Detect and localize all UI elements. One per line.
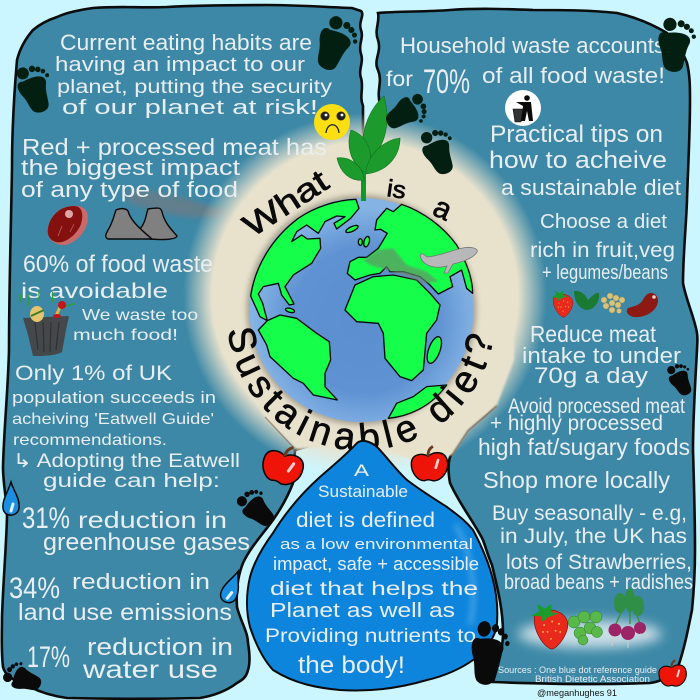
text: buy seasonally xyxy=(492,502,693,594)
icon: volcanoes xyxy=(106,208,177,240)
text: 17% reduction in water use xyxy=(27,634,233,684)
text: practical tips heading: Practical tips on xyxy=(490,121,663,148)
text: avoid processed: high fat/sugary foods xyxy=(478,434,690,460)
text: only 1% of UK population: ↳ Adopting the Eatwell xyxy=(13,451,240,472)
text: reduce meat: Reduce meat xyxy=(530,321,657,347)
text: household waste 70%: 70% xyxy=(423,63,470,101)
text: sources: British Dietetic Association xyxy=(535,674,650,685)
text: current eating habits: of our planet at risk! xyxy=(62,97,318,119)
text: 34% reduction in land use emissions: 34% xyxy=(9,572,60,605)
text: definition: diet is defined xyxy=(296,509,435,532)
text: sources: Sources : One blue dot reference guide xyxy=(498,665,657,676)
icon: tidy man bin symbol xyxy=(505,90,541,126)
globe xyxy=(246,195,476,425)
text: only 1% of UK population xyxy=(12,362,240,492)
text: current eating habits xyxy=(55,30,333,119)
text: only 1% of UK population: recommendations. xyxy=(13,432,167,449)
text: choose a diet: Choose a diet xyxy=(540,211,667,233)
text: practical tips heading: a sustainable diet xyxy=(501,175,681,200)
text: 31% reduction in greenhouse gases xyxy=(22,502,250,556)
text: buy seasonally: lots of Strawberries, xyxy=(506,551,692,574)
text: definition xyxy=(265,461,479,679)
text: household waste 70% xyxy=(386,33,665,101)
text: choose a diet xyxy=(530,211,675,284)
title: What is a Sustainable diet?: What xyxy=(236,162,335,244)
text: household waste 70%: Household waste accounts xyxy=(400,33,665,58)
text: definition: the body! xyxy=(298,652,405,679)
text: 60% of food waste: much food! xyxy=(73,327,178,344)
text: only 1% of UK population: Only 1% of UK xyxy=(15,362,172,385)
text: 34% reduction in land use emissions: reduction in xyxy=(72,569,210,594)
text: 31% reduction in greenhouse gases: greenhouse gases xyxy=(43,529,250,556)
text: definition: Sustainable xyxy=(318,482,408,501)
text: author credit: @meganhughes 91 xyxy=(537,688,617,699)
text: buy seasonally: Buy seasonally - e.g, xyxy=(492,502,687,525)
text: definition: as a low environmental xyxy=(280,537,473,553)
text: 60% of food waste: We waste too xyxy=(82,307,198,324)
text: practical tips heading: how to acheive xyxy=(489,147,667,174)
text: 34% reduction in land use emissions: land use emissions xyxy=(18,599,232,625)
text: red and processed meat: the biggest impact xyxy=(21,155,240,180)
text: buy seasonally: in July, the UK has xyxy=(500,525,687,548)
smoke cloud from volcano xyxy=(128,190,228,218)
text: choose a diet: + legumes/beans xyxy=(542,262,668,284)
text: 31% reduction in greenhouse gases: reduction in xyxy=(78,507,227,533)
text: avoid processed: + highly processed xyxy=(490,412,663,435)
text: 60% of food waste: is avoidable xyxy=(21,280,168,303)
icons: apples xyxy=(260,443,688,689)
icon: red meat xyxy=(48,206,88,245)
text: 17% reduction in water use: water use xyxy=(82,656,218,684)
icon: sad face xyxy=(314,104,350,140)
title: What is a Sustainable diet?: Sustainable diet? xyxy=(228,328,492,450)
smoke over globe xyxy=(363,248,438,283)
icon: waste bin with food xyxy=(19,290,75,356)
title: What is a Sustainable diet?: a xyxy=(428,190,457,228)
text: avoid processed xyxy=(478,395,690,460)
title: What is a Sustainable diet? xyxy=(228,162,492,450)
text: choose a diet: rich in fruit,veg xyxy=(530,239,675,262)
text: 17% reduction in water use: reduction in xyxy=(87,634,233,661)
text: 31% reduction in greenhouse gases: 31% xyxy=(22,502,70,535)
text: definition: Planet as well as xyxy=(270,600,455,622)
text: red and processed meat: of any type of food xyxy=(21,177,238,202)
text: 17% reduction in water use: 17% xyxy=(27,641,70,674)
text: reduce meat xyxy=(522,321,681,388)
text: only 1% of UK population: guide can help: xyxy=(43,471,220,492)
text: 60% of food waste xyxy=(21,251,213,344)
icon: plant sprout xyxy=(337,96,400,201)
text: sources xyxy=(498,665,657,685)
text: definition: diet that helps the xyxy=(270,579,478,600)
text: reduce meat: intake to under xyxy=(522,343,681,368)
panel: right teal panel xyxy=(375,9,697,684)
text: household waste 70%: for xyxy=(386,68,413,91)
text: reduce meat: 70g a day xyxy=(534,363,648,388)
text: current eating habits: Current eating habits are xyxy=(60,30,312,55)
text: household waste 70%: of all food waste! xyxy=(482,63,665,88)
panel: water drop definition xyxy=(247,441,497,691)
text: only 1% of UK population: acheiving 'Eatwell Guide' xyxy=(12,411,214,428)
icons: strawberry, broad beans, radishes on cloud xyxy=(518,588,662,649)
text: only 1% of UK population: population succeeds in xyxy=(12,388,216,407)
text: red and processed meat xyxy=(21,134,327,202)
text: definition: A xyxy=(354,461,370,480)
icons: strawberry, spinach, legumes, kidney bean xyxy=(551,291,658,317)
text: definition: Providing nutrients to xyxy=(265,626,476,647)
icon: aeroplane xyxy=(420,247,477,273)
text: current eating habits: planet, putting the security xyxy=(57,77,333,98)
text: shop more locally: Shop more locally xyxy=(483,467,671,493)
icons: water drops xyxy=(3,482,246,605)
title: What is a Sustainable diet?: is xyxy=(385,175,408,205)
text: 34% reduction in land use emissions xyxy=(9,569,232,625)
cream halo behind globe xyxy=(183,113,547,477)
text: red and processed meat: Red + processed meat has xyxy=(22,134,327,160)
continents xyxy=(251,199,473,418)
panel: left teal panel xyxy=(2,5,363,699)
text: current eating habits: having an impact to our xyxy=(55,54,305,76)
text: 60% of food waste: 60% of food waste xyxy=(23,251,213,278)
text: definition: impact, safe + accessible xyxy=(273,554,479,574)
text: practical tips heading xyxy=(489,121,681,200)
